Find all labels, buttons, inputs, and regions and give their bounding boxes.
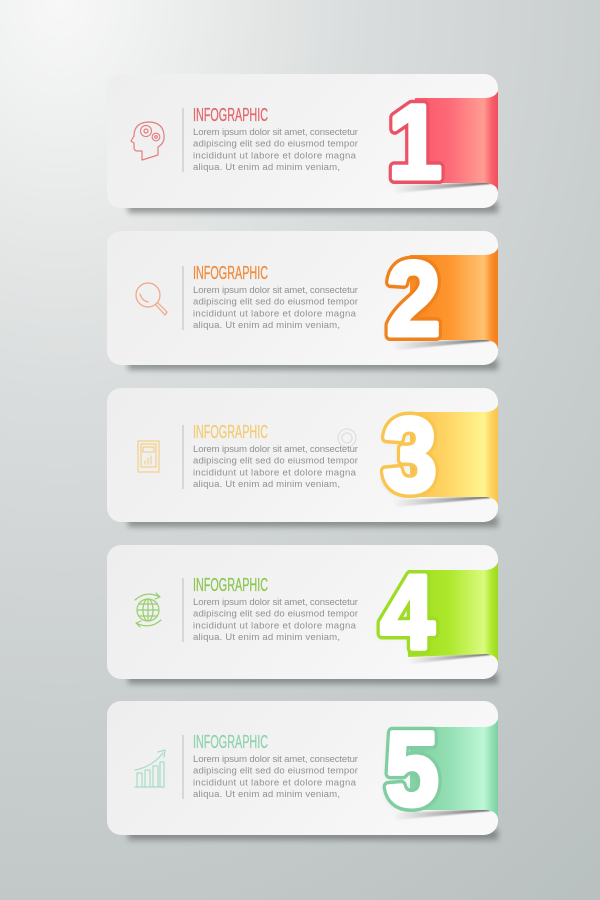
body text 3: incididunt ut labore et dolore magna	[193, 467, 357, 478]
body text 4: aliqua. Ut enim ad minim veniam,	[193, 632, 340, 643]
number 5: 5	[385, 711, 439, 828]
body text 3: adipiscing elit sed do eiusmod tempor	[193, 456, 359, 467]
body text 2: aliqua. Ut enim ad minim veniam,	[193, 320, 340, 331]
icon: head with gears	[131, 122, 164, 160]
body text 2	[193, 285, 359, 331]
body text 1: Lorem ipsum dolor sit amet, consectetur	[193, 127, 359, 138]
divider 5	[182, 735, 184, 799]
divider 4	[182, 578, 184, 642]
panel: step 1	[107, 74, 498, 213]
body text 5	[193, 754, 359, 800]
number 5: 5	[382, 714, 436, 831]
body text 3: Lorem ipsum dolor sit amet, consectetur	[193, 444, 359, 455]
number 4: 4	[381, 554, 434, 671]
heading 2: INFOGRAPHIC	[193, 263, 268, 283]
number 4: 4	[381, 554, 434, 671]
panel: step 2	[107, 231, 498, 370]
ribbon 3	[392, 405, 498, 507]
number 1: 1	[388, 84, 442, 201]
ribbon 5	[392, 719, 498, 820]
body text 4: adipiscing elit sed do eiusmod tempor	[193, 609, 359, 620]
body text 3: aliqua. Ut enim ad minim veniam,	[193, 479, 340, 490]
watermark	[338, 429, 356, 447]
panel: step 5	[107, 701, 498, 840]
number 3: 3	[383, 397, 437, 514]
divider 2	[182, 266, 184, 330]
body text 4: Lorem ipsum dolor sit amet, consectetur	[193, 597, 359, 608]
body text 2: Lorem ipsum dolor sit amet, consectetur	[193, 285, 359, 296]
card 5	[107, 701, 498, 835]
card 3	[107, 388, 498, 522]
number 1: 1	[385, 87, 439, 204]
body text 5: Lorem ipsum dolor sit amet, consectetur	[193, 754, 359, 765]
body text 5: adipiscing elit sed do eiusmod tempor	[193, 766, 359, 777]
ribbon 4	[408, 562, 498, 664]
number 2: 2	[387, 241, 440, 358]
body text 5: aliqua. Ut enim ad minim veniam,	[193, 789, 340, 800]
number 2: 2	[387, 241, 440, 358]
heading 3: INFOGRAPHIC	[193, 422, 268, 442]
body text 4	[193, 597, 359, 643]
panel: step 3	[107, 388, 498, 527]
icon: magnifying glass	[136, 283, 167, 315]
panel: step 4	[107, 545, 498, 684]
divider 3	[182, 425, 184, 489]
number 2: 2	[384, 244, 438, 361]
heading 1: INFOGRAPHIC	[193, 105, 268, 125]
ribbon 2	[392, 248, 498, 350]
body text 2: adipiscing elit sed do eiusmod tempor	[193, 297, 359, 308]
body text 1	[193, 127, 359, 173]
card shadow 5	[128, 829, 498, 840]
number 1: 1	[388, 84, 442, 201]
number 4: 4	[378, 557, 432, 674]
body text 4: incididunt ut labore et dolore magna	[193, 620, 357, 631]
number 5: 5	[385, 711, 439, 828]
card shadow 1	[128, 202, 498, 213]
card 1	[107, 74, 498, 208]
body text 5: incididunt ut labore et dolore magna	[193, 777, 357, 788]
card shadow 2	[128, 359, 498, 370]
body text 1: incididunt ut labore et dolore magna	[193, 150, 357, 161]
card shadow 4	[128, 673, 498, 684]
heading 4: INFOGRAPHIC	[193, 575, 268, 595]
body text 3	[193, 444, 359, 490]
divider 1	[182, 108, 184, 172]
icon: globe with arrows	[135, 593, 161, 627]
body text 2: incididunt ut labore et dolore magna	[193, 308, 357, 319]
body text 1: aliqua. Ut enim ad minim veniam,	[193, 162, 340, 173]
number 3: 3	[380, 400, 434, 517]
card shadow 3	[128, 516, 498, 527]
body text 1: adipiscing elit sed do eiusmod tempor	[193, 139, 359, 150]
icon: growth chart	[135, 750, 165, 787]
ribbon 1	[392, 91, 498, 193]
number 3: 3	[383, 397, 437, 514]
card 4	[107, 545, 498, 679]
icon: tablet with chart	[138, 441, 159, 472]
card 2	[107, 231, 498, 365]
heading 5: INFOGRAPHIC	[193, 732, 268, 752]
